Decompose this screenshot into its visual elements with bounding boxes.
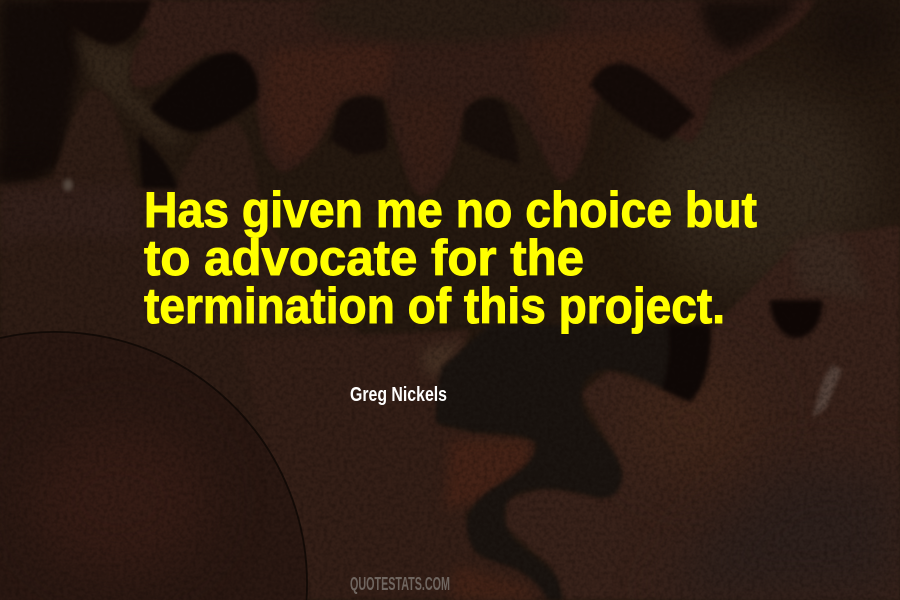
pale strand behind gears: [79, 42, 174, 140]
top gear holes: [50, 0, 152, 45]
pale rust smear: [812, 365, 842, 418]
right rust gear: [505, 225, 900, 600]
quote line 1: Has given me no choice but: [144, 182, 757, 238]
pale crack highlight: [423, 344, 456, 376]
large circular plate bottom left: [266, 450, 306, 597]
hole beside pit: [662, 325, 710, 402]
lower left gear rust band: [0, 185, 140, 250]
plate rim: [0, 332, 307, 600]
top right darkness: [834, 10, 881, 48]
bottom tooth rust: [454, 570, 531, 600]
right haze: [655, 98, 865, 280]
author name: Greg Nickels: [350, 384, 447, 406]
tooth rust: [445, 440, 530, 510]
lower left gear teeth: [3, 92, 354, 434]
left dark column: [0, 0, 80, 182]
centre lower gear: [308, 330, 544, 600]
dark pit between gears: [436, 325, 672, 600]
quote line 2: to advocate for the: [144, 230, 584, 286]
quote text: [144, 182, 757, 334]
top gear rust accents: [270, 50, 387, 152]
right gear rust highlight: [642, 377, 707, 404]
plate rust patch: [53, 446, 187, 554]
left bolt: [63, 179, 73, 191]
watermark: QUOTESTATS.COM: [350, 574, 450, 594]
top gear body: [134, 0, 813, 196]
upper right gear shade: [790, 230, 870, 300]
quote line 3: termination of this project.: [144, 278, 725, 334]
lower right grey plate: [710, 480, 888, 588]
top gear hub shadow: [318, 2, 562, 38]
small hole right: [770, 300, 822, 338]
